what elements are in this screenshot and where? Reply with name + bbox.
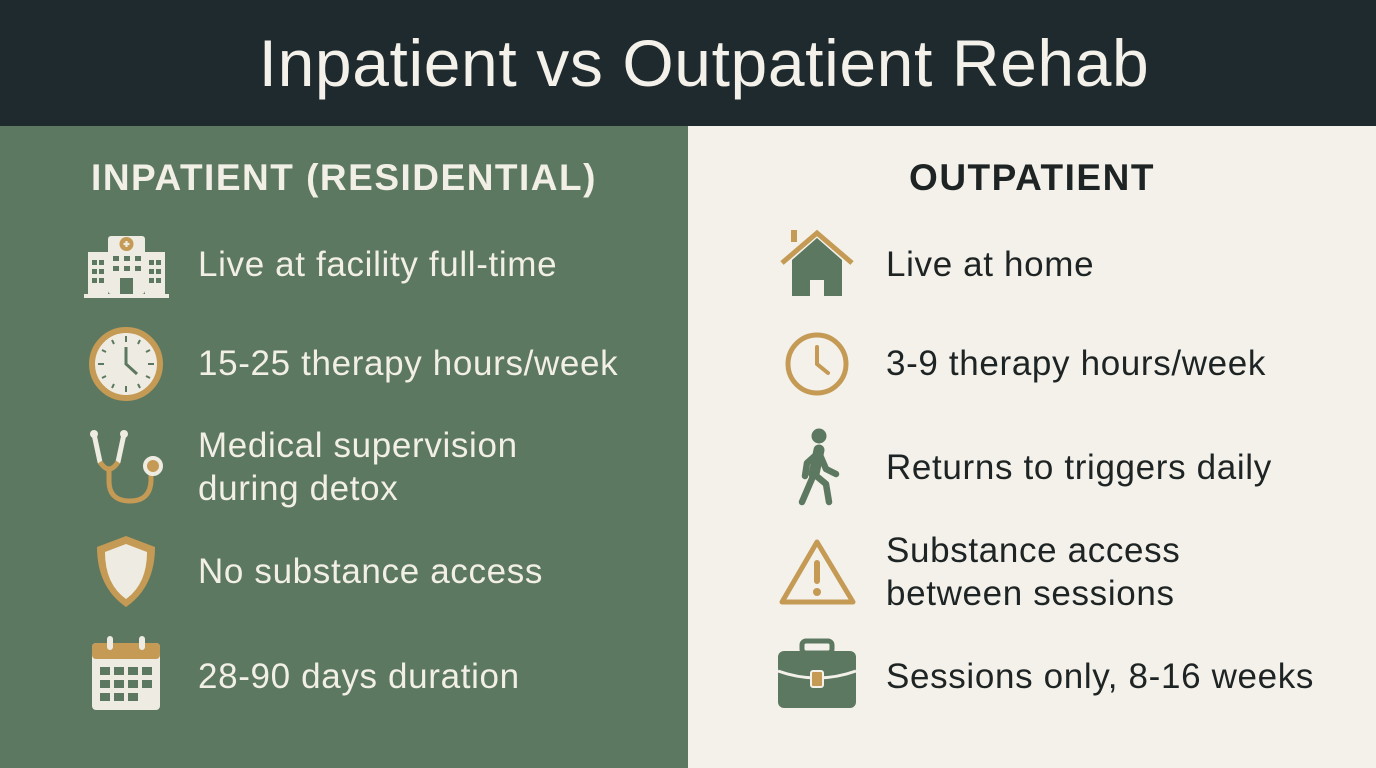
panel: outpatient (688, 126, 1376, 768)
text: returns to triggers: Returns to triggers daily (886, 448, 1272, 487)
icon: shield (97, 536, 155, 607)
icon: house (780, 230, 854, 296)
text: 15-25 hours: 15-25 therapy hours/week (198, 344, 618, 383)
text: 3-9 hours: 3-9 therapy hours/week (886, 344, 1266, 383)
text: substance access: Substance access (886, 531, 1180, 570)
text: live at home: Live at home (886, 245, 1094, 284)
text: 28-90 days: 28-90 days duration (198, 657, 520, 696)
icon: hospital (84, 236, 169, 298)
icon: clock (89, 327, 163, 401)
icon: calendar (92, 636, 160, 710)
icon: stethoscope (90, 430, 163, 504)
text: sessions only: Sessions only, 8-16 weeks (886, 657, 1314, 696)
text: substance access (886, 531, 1180, 613)
text: medical supervision (198, 426, 518, 508)
heading: outpatient: OUTPATIENT (909, 157, 1155, 198)
text: medical supervision: Medical supervision (198, 426, 518, 465)
icon: briefcase (778, 638, 856, 708)
icon: warning (780, 540, 856, 604)
text: medical supervision: during detox (198, 469, 398, 508)
heading: inpatient: INPATIENT (RESIDENTIAL) (91, 157, 597, 198)
title: Inpatient vs Outpatient Rehab (259, 26, 1149, 100)
icon: clock outline (786, 332, 848, 396)
text: live at facility: Live at facility full-time (198, 245, 557, 284)
icon: walking person (798, 428, 840, 506)
text: substance access: between sessions (886, 574, 1175, 613)
text: no substance access: No substance access (198, 552, 543, 591)
header bar (0, 0, 1376, 126)
panel: inpatient (0, 126, 688, 768)
